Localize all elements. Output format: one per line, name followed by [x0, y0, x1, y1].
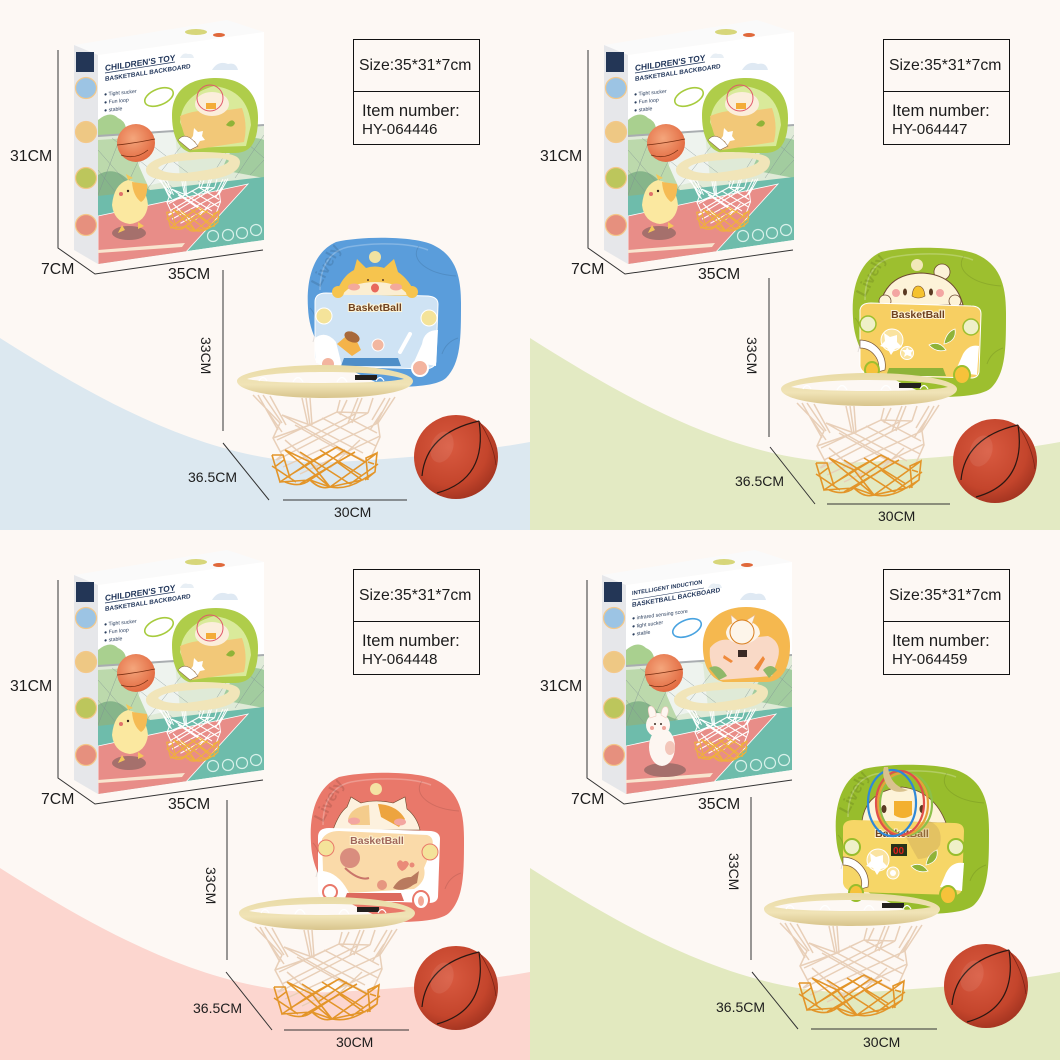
box dimension lines [587, 580, 792, 804]
box text: ● Tight sucker [104, 619, 137, 628]
hoop dimension lines [226, 800, 409, 1030]
info table: Item number: [892, 631, 990, 650]
ring on box [142, 614, 176, 640]
box dimension labels [10, 678, 210, 813]
box text: BASKETBALL BACKBOARD [105, 593, 191, 613]
box text: ● Fun loop [104, 628, 129, 636]
basketball [953, 419, 1037, 503]
box dimension lines [58, 50, 263, 274]
info table [883, 570, 1010, 674]
box text [634, 52, 721, 114]
box text: ● tight sucker [632, 620, 663, 630]
product box with packaging art [602, 550, 792, 796]
box backboard art [702, 78, 788, 153]
box text: CHILDREN'S TOY [105, 582, 176, 603]
hoop dimension labels [188, 337, 371, 520]
box backboard art [172, 608, 258, 683]
backboard: green chick with score display: BasketBall [875, 828, 929, 840]
box text: ● Fun loop [634, 98, 659, 106]
panel: bottom-left red model [0, 530, 530, 1060]
box dimension labels: 35CM [168, 796, 210, 813]
info table: Item number: [362, 101, 460, 120]
box text: ● stable [104, 636, 123, 644]
backboard: blue dog: Lively [309, 242, 345, 290]
box text: BASKETBALL BACKBOARD [635, 63, 721, 83]
info table: HY-064447 [892, 121, 967, 138]
info table [883, 40, 1010, 144]
box dimension labels: 31CM [540, 678, 582, 695]
hoop dimension labels: 36.5CM [716, 999, 765, 1015]
box text: ● stable [104, 106, 123, 114]
panel: bottom-right green induction model [530, 530, 1060, 1060]
hoop: rim and net [764, 893, 940, 1016]
backboard: green chick with score display: Lively [837, 769, 873, 817]
box dimension labels: 7CM [41, 791, 74, 808]
box text [632, 580, 720, 638]
mascot: chick [642, 174, 678, 240]
box dimension labels [540, 148, 740, 283]
basketball [414, 946, 498, 1030]
info table [353, 40, 480, 144]
background wave: green [530, 338, 1060, 530]
box text: BASKETBALL BACKBOARD [105, 63, 191, 83]
backboard: red cat [311, 773, 464, 922]
hoop dimension labels: 30CM [878, 508, 915, 524]
info table: Size:35*31*7cm [359, 587, 471, 604]
hook and toss rings [868, 767, 932, 836]
hoop dimension labels: 33CM [198, 337, 214, 374]
background wave: pink [0, 868, 530, 1060]
hoop dimension labels: 30CM [863, 1034, 900, 1050]
info table: HY-064448 [362, 651, 437, 668]
box backboard art [703, 607, 790, 682]
info table: HY-064446 [362, 121, 437, 138]
background wave: green [530, 868, 1060, 1060]
box text: CHILDREN'S TOY [105, 52, 176, 73]
backboard: red cat: BasketBall [350, 835, 404, 847]
box text [104, 52, 191, 114]
box dimension labels: 7CM [571, 261, 604, 278]
box dimension lines [58, 580, 263, 804]
panel: top-right green model [530, 0, 1060, 530]
ring on box [672, 84, 706, 110]
hoop dimension labels: 33CM [726, 853, 742, 890]
hoop dimension labels: 36.5CM [193, 1000, 242, 1016]
hoop dimension labels [735, 337, 915, 524]
box dimension labels: 31CM [10, 678, 52, 695]
box text: ● Tight sucker [104, 89, 137, 98]
info table: Size:35*31*7cm [889, 587, 1001, 604]
box text: INTELLIGENT INDUCTION [632, 580, 702, 597]
hoop dimension lines [769, 278, 950, 504]
product box with packaging art [74, 550, 264, 796]
mascot: rabbit [644, 706, 686, 777]
box text: ● infrared sensing score [632, 609, 688, 622]
hoop dimension lines [223, 270, 407, 500]
hoop dimension labels [193, 867, 373, 1050]
background wave: blue [0, 338, 530, 530]
box dimension labels [10, 148, 210, 283]
box dimension labels: 31CM [540, 148, 582, 165]
box dimension labels: 35CM [168, 266, 210, 283]
product box with packaging art [74, 20, 264, 266]
hoop: rim and net [239, 897, 415, 1020]
hoop dimension labels: 30CM [336, 1034, 373, 1050]
info table: Size:35*31*7cm [359, 57, 471, 74]
info table [353, 570, 480, 674]
backboard: green chick with score display [836, 765, 989, 914]
box text: ● Tight sucker [634, 89, 667, 98]
hoop: rim and net [781, 373, 957, 496]
panel: top-left blue model [0, 0, 530, 530]
box text: BASKETBALL BACKBOARD [632, 587, 720, 609]
backboard: green chick with score display: 00 [893, 846, 905, 857]
box dimension labels [540, 678, 740, 813]
box dimension labels: 35CM [698, 796, 740, 813]
hoop dimension labels: 36.5CM [188, 469, 237, 485]
box text: CHILDREN'S TOY [635, 52, 706, 73]
box dimension labels: 31CM [10, 148, 52, 165]
hoop: rim and net [237, 365, 413, 488]
hoop dimension labels [716, 853, 900, 1050]
box text: ● Fun loop [104, 98, 129, 106]
box text: ● stable [632, 630, 651, 638]
hoop dimension lines [751, 797, 937, 1029]
mascot: chick [112, 704, 148, 770]
info table: Item number: [892, 101, 990, 120]
hoop dimension labels: 33CM [203, 867, 219, 904]
product box with packaging art [604, 20, 794, 266]
box dimension labels: 35CM [698, 266, 740, 283]
box dimension labels: 7CM [571, 791, 604, 808]
backboard: green chick: BasketBall [891, 309, 945, 321]
ring on box [670, 615, 704, 641]
info table: HY-064459 [892, 651, 967, 668]
backboard: green chick [853, 248, 1006, 397]
box dimension labels: 7CM [41, 261, 74, 278]
info table: Size:35*31*7cm [889, 57, 1001, 74]
mascot: chick [112, 174, 148, 240]
hoop dimension labels: 30CM [334, 504, 371, 520]
box text [104, 582, 191, 644]
backboard: blue dog: BasketBall [348, 302, 402, 314]
hoop dimension labels: 36.5CM [735, 473, 784, 489]
hoop dimension labels: 33CM [744, 337, 760, 374]
box text: ● stable [634, 106, 653, 114]
info table: Item number: [362, 631, 460, 650]
backboard: blue dog [308, 238, 461, 387]
ring on box [142, 84, 176, 110]
box dimension lines [588, 50, 793, 274]
backboard: green chick: Lively [854, 252, 890, 300]
basketball [944, 944, 1028, 1028]
backboard: red cat: Lively [312, 777, 348, 825]
basketball [414, 415, 498, 499]
box backboard art [172, 78, 258, 153]
